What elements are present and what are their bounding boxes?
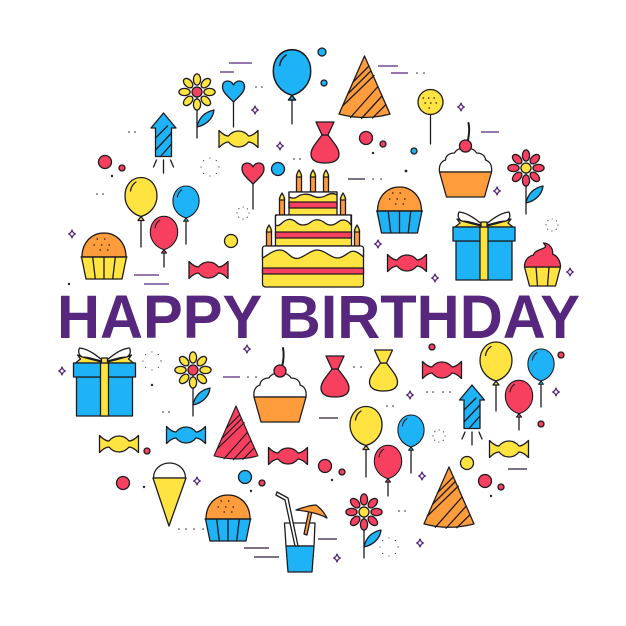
icon: red balloon — [150, 216, 178, 267]
icon: blue balloon lower — [398, 415, 424, 473]
icon: candies — [100, 130, 528, 464]
icon: gift box right — [453, 212, 515, 280]
icon: cupcake with cherry — [439, 123, 492, 197]
icon: yellow balloon — [125, 178, 157, 247]
icon: muffin blue cup — [376, 187, 422, 233]
icon: muffin blue cup bottom — [205, 495, 251, 541]
icon: orange party hat bottom — [424, 467, 474, 528]
icon: red balloon right — [505, 380, 533, 430]
icon: red candy bag lower — [321, 356, 349, 397]
icon: yellow flower lower — [175, 352, 211, 416]
icon: orange party hat top — [339, 56, 390, 118]
title: HAPPY BIRTHDAY — [57, 283, 580, 351]
icon: red candy bag — [311, 122, 339, 163]
icon: gift box left — [74, 348, 136, 416]
icon: red balloon lower — [374, 445, 402, 496]
decorative sparkles — [58, 103, 574, 562]
icon: birthday cake — [262, 170, 364, 287]
decorative dotted rings — [143, 158, 558, 556]
icon: rocket lower — [460, 385, 484, 445]
icon: yellow balloon lower — [350, 406, 382, 477]
decorative small dots — [68, 72, 492, 530]
icon: red heart lollipop — [242, 163, 264, 209]
icon: blue heart lollipop — [222, 81, 244, 127]
icon: red party hat — [214, 406, 258, 460]
icon: round lollipop — [418, 90, 443, 144]
icon: big blue balloon — [273, 50, 311, 124]
icon: blue balloon — [173, 186, 199, 244]
icon: yellow flower — [179, 74, 215, 138]
icon: yellow candy bag — [370, 350, 398, 391]
icon: blue balloon right — [528, 349, 554, 407]
icon: ice cream cone — [153, 463, 186, 526]
icon: red flower — [508, 150, 544, 214]
icon: cupcake with cherry lower — [254, 348, 306, 422]
icon: rocket — [151, 113, 176, 173]
icon: yellow balloon right — [480, 342, 512, 411]
decorative confetti circles — [98, 48, 564, 490]
icon: drink with straw and umbrella — [276, 492, 327, 572]
icon: muffin yellow cup — [81, 233, 127, 279]
icon: red frosted cupcake — [524, 243, 560, 286]
decorative dash lines — [134, 63, 527, 557]
icon: red flower lower — [346, 494, 382, 558]
